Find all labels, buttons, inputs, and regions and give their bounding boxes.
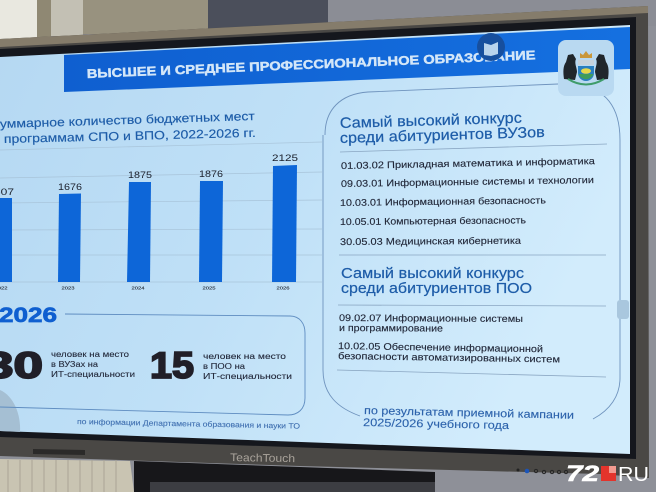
heading: colleges: среди абитуриентов ПОО — [341, 280, 532, 297]
panel: stats outline — [0, 314, 305, 415]
bars — [0, 165, 297, 282]
stat: fifteen per place: ИТ-специальности — [203, 371, 292, 381]
header title: ВЫСШЕЕ И СРЕДНЕЕ ПРОФЕССИОНАЛЬНОЕ ОБРАЗОВАНИЕ — [87, 48, 536, 81]
list: college programmes: и программирование — [339, 323, 443, 335]
bar value labels: 1876 — [199, 169, 223, 180]
list: university programmes — [340, 156, 596, 248]
radiator and furniture below the screen — [0, 459, 435, 492]
chart title: программам СПО и ВПО, 2022-2026 гг. — [4, 126, 256, 146]
heading: colleges — [341, 265, 532, 297]
bar value labels: 1875 — [128, 170, 152, 181]
stat: fifteen per place — [150, 345, 292, 386]
admissions note: 2025/2026 учебного года — [363, 417, 510, 432]
admissions note — [363, 405, 574, 432]
heading: universities — [340, 110, 545, 147]
stat: thirty per place — [0, 345, 135, 386]
year labels: 2025 — [202, 286, 216, 290]
bar value labels: 1676 — [58, 182, 82, 193]
source note: по информации Департамента образования и науки ТО — [77, 417, 300, 431]
bar value labels — [0, 153, 298, 198]
stat: thirty per place: ИТ-специальности — [51, 369, 135, 379]
year labels — [0, 286, 290, 290]
list: university programmes: 30.05.03 Медицинская кибернетика — [340, 236, 522, 248]
heading: universities: среди абитуриентов ВУЗов — [340, 124, 545, 147]
watermark logo: 72 — [566, 461, 600, 486]
list: college programmes: 10.02.05 Обеспечение информационной — [338, 341, 543, 355]
indicator lights — [516, 468, 568, 474]
icon: open book badge — [477, 33, 505, 61]
heading: colleges: Самый высокий конкурс — [341, 265, 525, 282]
stat: fifteen per place: в ПОО на — [203, 361, 245, 371]
stat: fifteen per place: человек на место — [203, 351, 286, 361]
watermark logo: RU — [618, 464, 649, 486]
bar value labels: 2125 — [272, 153, 298, 164]
stat: thirty per place: человек на место — [51, 349, 129, 359]
chart title: уммарное количество бюджетных мест — [0, 109, 256, 131]
year heading: 2026 — [0, 304, 57, 327]
bar chart — [0, 142, 322, 290]
side tab on the screen — [617, 300, 629, 319]
stat: thirty per place: в ВУЗах на — [51, 359, 98, 369]
admissions note: по результатам приемной кампании — [364, 405, 574, 422]
year labels: 2026 — [276, 286, 290, 290]
list: college programmes: 09.02.07 Информационные системы — [339, 313, 523, 325]
list: university programmes: 09.03.01 Информационные системы и технологии — [341, 175, 594, 190]
stat: fifteen per place: 15 — [150, 345, 194, 386]
year labels: 2023 — [62, 286, 75, 290]
chart title — [0, 109, 256, 146]
list: university programmes: 10.05.01 Компьютерная безопасность — [340, 215, 526, 228]
list: university programmes: 01.03.02 Прикладная математика и информатика — [341, 156, 596, 172]
brand on the bezel: TeachTouch — [230, 452, 295, 465]
shadow of a person in front of the screen — [0, 390, 20, 432]
icon: coat of arms tile — [558, 40, 614, 96]
header band — [64, 27, 630, 92]
list: university programmes: 10.03.01 Информационная безопасность — [340, 195, 546, 209]
heading: universities: Самый высокий конкурс — [340, 110, 523, 132]
watermark logo — [566, 461, 649, 486]
year labels: 2024 — [132, 286, 145, 290]
panel: competition outline — [323, 84, 620, 419]
list: college programmes: безопасности автоматизированных систем — [338, 351, 560, 365]
list: college programmes — [338, 313, 560, 365]
